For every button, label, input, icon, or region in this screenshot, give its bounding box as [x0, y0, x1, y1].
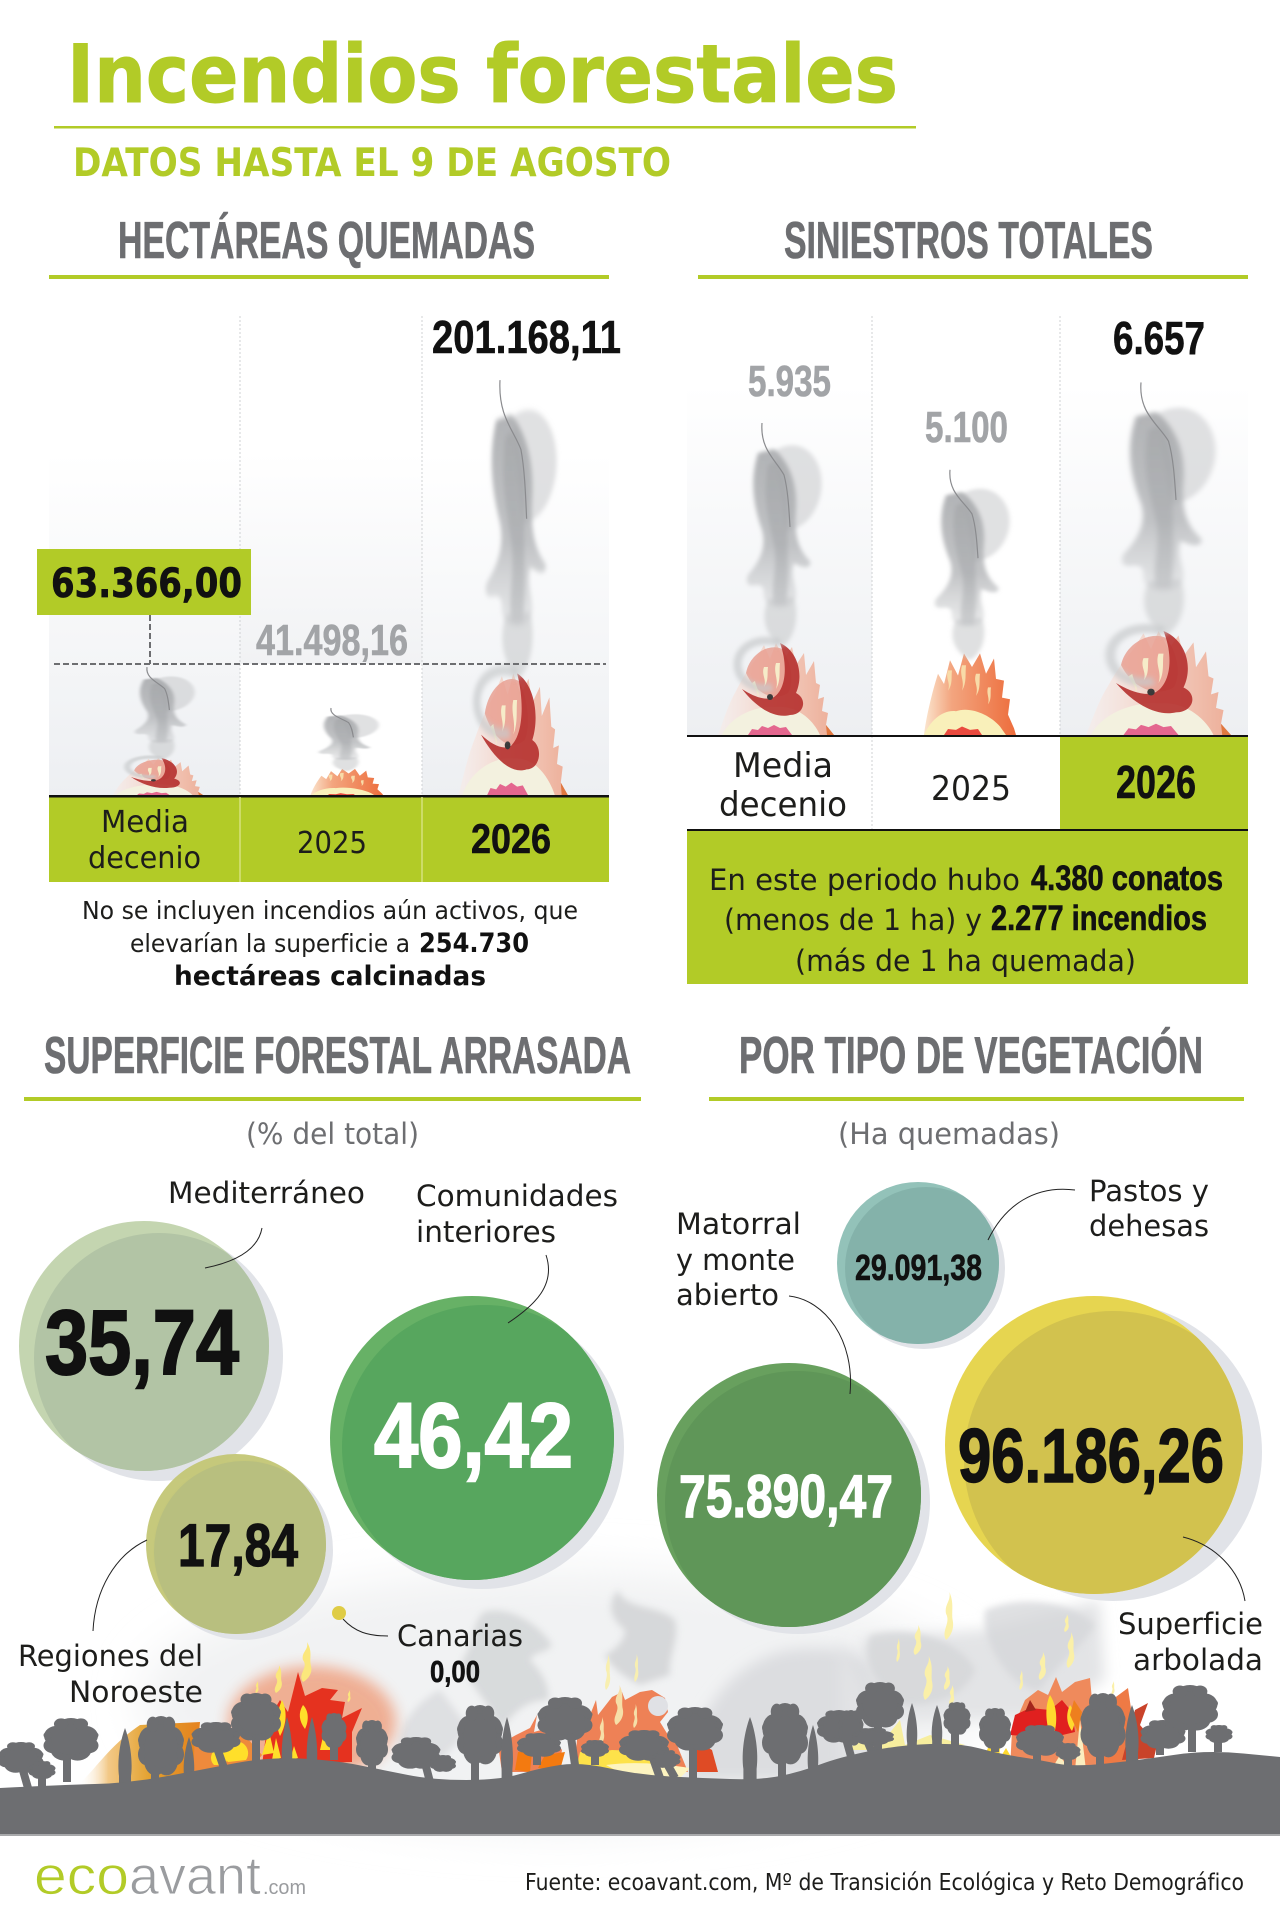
label: comunidades interiores: interiores [416, 1215, 556, 1249]
flame: media decenio [718, 423, 834, 735]
callout: conatos e incendios: (menos de 1 ha) y [724, 903, 982, 937]
subheading: ha quemadas: (Ha quemadas) [838, 1117, 1060, 1151]
callout: conatos e incendios [687, 831, 1248, 984]
note: incendios activos: elevarían la superficie a [130, 929, 410, 958]
fire: left cluster [78, 1642, 396, 1785]
logo: ecoavant [34, 1846, 306, 1906]
category strip: 2026 [471, 815, 551, 862]
title: Incendios forestales [67, 28, 898, 121]
flame: 2026 [458, 380, 568, 796]
label: canarias: Canarias [397, 1619, 523, 1653]
label: regiones del noroeste: Noroeste [69, 1675, 203, 1709]
value: media decenio: 5.935 [748, 357, 831, 406]
label: pastos y dehesas: dehesas [1089, 1209, 1209, 1243]
category strip: 2025 [297, 826, 367, 861]
note: incendios activos: No se incluyen incendios aún activos, que [82, 896, 578, 925]
bubble: superficie arbolada 96.186,26 [945, 1296, 1262, 1609]
callout: conatos e incendios: 4.380 conatos [1031, 859, 1223, 898]
value box: media decenio: 63.366,00 [51, 561, 242, 607]
label: canarias: 0,00 [430, 1654, 480, 1689]
heading: hectáreas quemadas: HECTÁREAS QUEMADAS [118, 212, 535, 270]
label: comunidades interiores [416, 1179, 618, 1323]
label: superficie arbolada: arbolada [1133, 1643, 1263, 1677]
panel: hectáreas quemadas chart [37, 311, 621, 882]
label: matorral y monte abierto: abierto [676, 1278, 779, 1312]
trees [0, 1682, 1232, 1788]
value box: media decenio [37, 549, 251, 615]
note: incendios activos: hectáreas calcinadas [174, 961, 486, 992]
bubble: comunidades interiores 46,42 [330, 1296, 626, 1589]
category strip: Media [101, 805, 189, 840]
bubble: mediterráneo 35,74: 35,74 [45, 1292, 239, 1394]
logo: ecoavant: avant [129, 1846, 261, 1906]
label: regiones del noroeste [18, 1540, 203, 1709]
label: regiones del noroeste: Regiones del [18, 1639, 203, 1673]
label: matorral y monte abierto: y monte [676, 1243, 795, 1277]
bubble: pastos y dehesas 29.091,38: 29.091,38 [855, 1247, 982, 1288]
note: incendios activos [82, 896, 578, 992]
category row: decenio [719, 785, 847, 825]
logo: ecoavant: .com [263, 1877, 306, 1899]
subtitle: DATOS HASTA EL 9 DE AGOSTO [73, 141, 671, 186]
callout: conatos e incendios: En este periodo hubo [709, 863, 1020, 897]
label: comunidades interiores: Comunidades [416, 1179, 618, 1213]
label: matorral y monte abierto [676, 1207, 851, 1394]
background haze and smoke [140, 1570, 1105, 1830]
bubble: regiones del noroeste 17,84: 17,84 [178, 1512, 298, 1579]
bubble: matorral y monte abierto 75.890,47: 75.890,47 [679, 1463, 893, 1530]
flame: 2025 [310, 708, 384, 796]
value: 2026: 6.657 [1113, 312, 1205, 364]
bubble: pastos y dehesas 29.091,38 [837, 1182, 1007, 1349]
category row: Media [733, 746, 833, 786]
heading: superficie forestal arrasada: SUPERFICIE FORESTAL ARRASADA [44, 1027, 631, 1085]
callout: conatos e incendios: (más de 1 ha quemada) [795, 944, 1136, 978]
label: mediterráneo: Mediterráneo [168, 1176, 365, 1210]
flame: 2026 [1086, 382, 1231, 735]
category row [687, 735, 1248, 831]
label: canarias [343, 1619, 523, 1689]
logo: ecoavant: eco [34, 1846, 129, 1906]
flame: media decenio [112, 667, 205, 796]
bubble: mediterráneo 35,74 [19, 1221, 284, 1483]
label: matorral y monte abierto: Matorral [676, 1207, 801, 1241]
category row: 2026 [1116, 756, 1196, 808]
flame: 2025 [924, 470, 1016, 735]
label: pastos y dehesas [988, 1174, 1209, 1243]
fire: right cluster [850, 1592, 1157, 1772]
category row: 2025 [931, 769, 1011, 809]
bubble: matorral y monte abierto 75.890,47 [657, 1363, 930, 1635]
fire: centre cluster [498, 1654, 718, 1778]
value: 2026: 201.168,11 [432, 311, 621, 363]
bubble: regiones del noroeste 17,84 [146, 1454, 334, 1641]
callout: conatos e incendios: 2.277 incendios [991, 899, 1207, 938]
value: 2025: 5.100 [925, 403, 1008, 452]
label: superficie arbolada [1118, 1537, 1263, 1677]
panel: siniestros totales chart [687, 312, 1248, 984]
bubble: comunidades interiores 46,42: 46,42 [374, 1385, 573, 1487]
value: 2025: 41.498,16 [256, 616, 408, 665]
category strip: decenio [88, 841, 201, 876]
subheading: % del total: (% del total) [246, 1117, 419, 1151]
label: mediterráneo [168, 1176, 365, 1268]
bubble: canarias dot [332, 1606, 346, 1620]
label: pastos y dehesas: Pastos y [1089, 1174, 1209, 1208]
category strip [49, 795, 609, 882]
ground [0, 1744, 1280, 1835]
label: superficie arbolada: Superficie [1118, 1607, 1263, 1641]
note: incendios activos: 254.730 [419, 928, 529, 959]
